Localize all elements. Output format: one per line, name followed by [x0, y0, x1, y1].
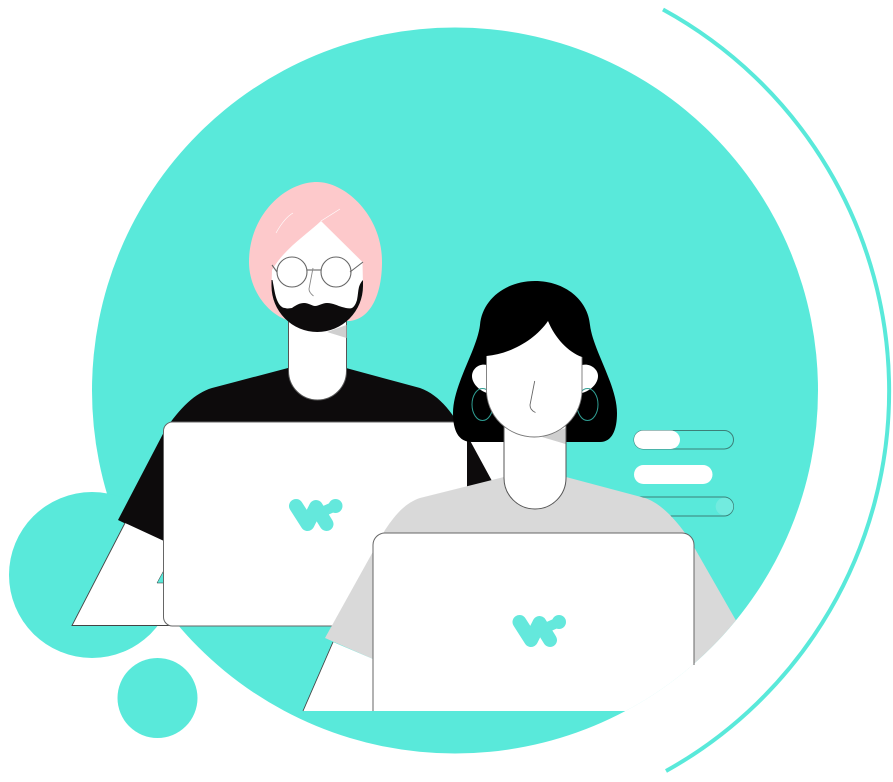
man: laptop	[164, 422, 524, 626]
slider: full white pill	[634, 465, 712, 484]
woman figure	[303, 281, 736, 711]
man figure	[72, 182, 524, 626]
woman: laptop logo	[520, 618, 562, 640]
man: turban	[249, 182, 382, 321]
large teal background circle	[92, 28, 818, 754]
outer teal arc	[663, 10, 889, 771]
man: arm outline	[72, 523, 170, 626]
man: laptop logo	[296, 502, 339, 524]
man: face	[272, 221, 363, 332]
slider: progress bar three	[630, 497, 734, 516]
slider: progress bar one	[634, 430, 734, 449]
left teal circle	[9, 492, 175, 658]
woman: white wedge under laptop	[626, 664, 694, 711]
man: neck	[288, 315, 346, 400]
woman: right ear	[582, 365, 598, 393]
small teal circle	[118, 658, 198, 738]
woman: neck shadow	[542, 428, 566, 444]
woman: hair	[453, 281, 617, 442]
woman: arm and laptop	[303, 533, 694, 711]
man: small teal triangle	[157, 570, 164, 583]
woman: left earring	[472, 388, 493, 420]
woman: face	[486, 321, 582, 437]
woman: grey t-shirt	[325, 477, 736, 670]
woman: nose	[530, 381, 536, 412]
woman: laptop outline	[373, 533, 694, 711]
woman: arm	[304, 642, 372, 711]
woman: laptop	[373, 533, 694, 711]
man: beard and moustache	[272, 280, 363, 332]
man: arm	[72, 523, 170, 626]
woman: arm outline	[303, 642, 333, 711]
man: black t-shirt	[118, 368, 492, 543]
man: nose	[309, 268, 314, 296]
man: neck shadow	[327, 325, 346, 338]
black strip to the right of first laptop	[467, 435, 492, 490]
man: turban highlights	[276, 209, 340, 233]
woman: left ear	[472, 365, 487, 393]
woman: right earring	[577, 388, 598, 420]
woman: jaw and chin outline	[486, 356, 582, 437]
man: glasses	[272, 257, 363, 287]
woman: neck	[504, 425, 566, 509]
